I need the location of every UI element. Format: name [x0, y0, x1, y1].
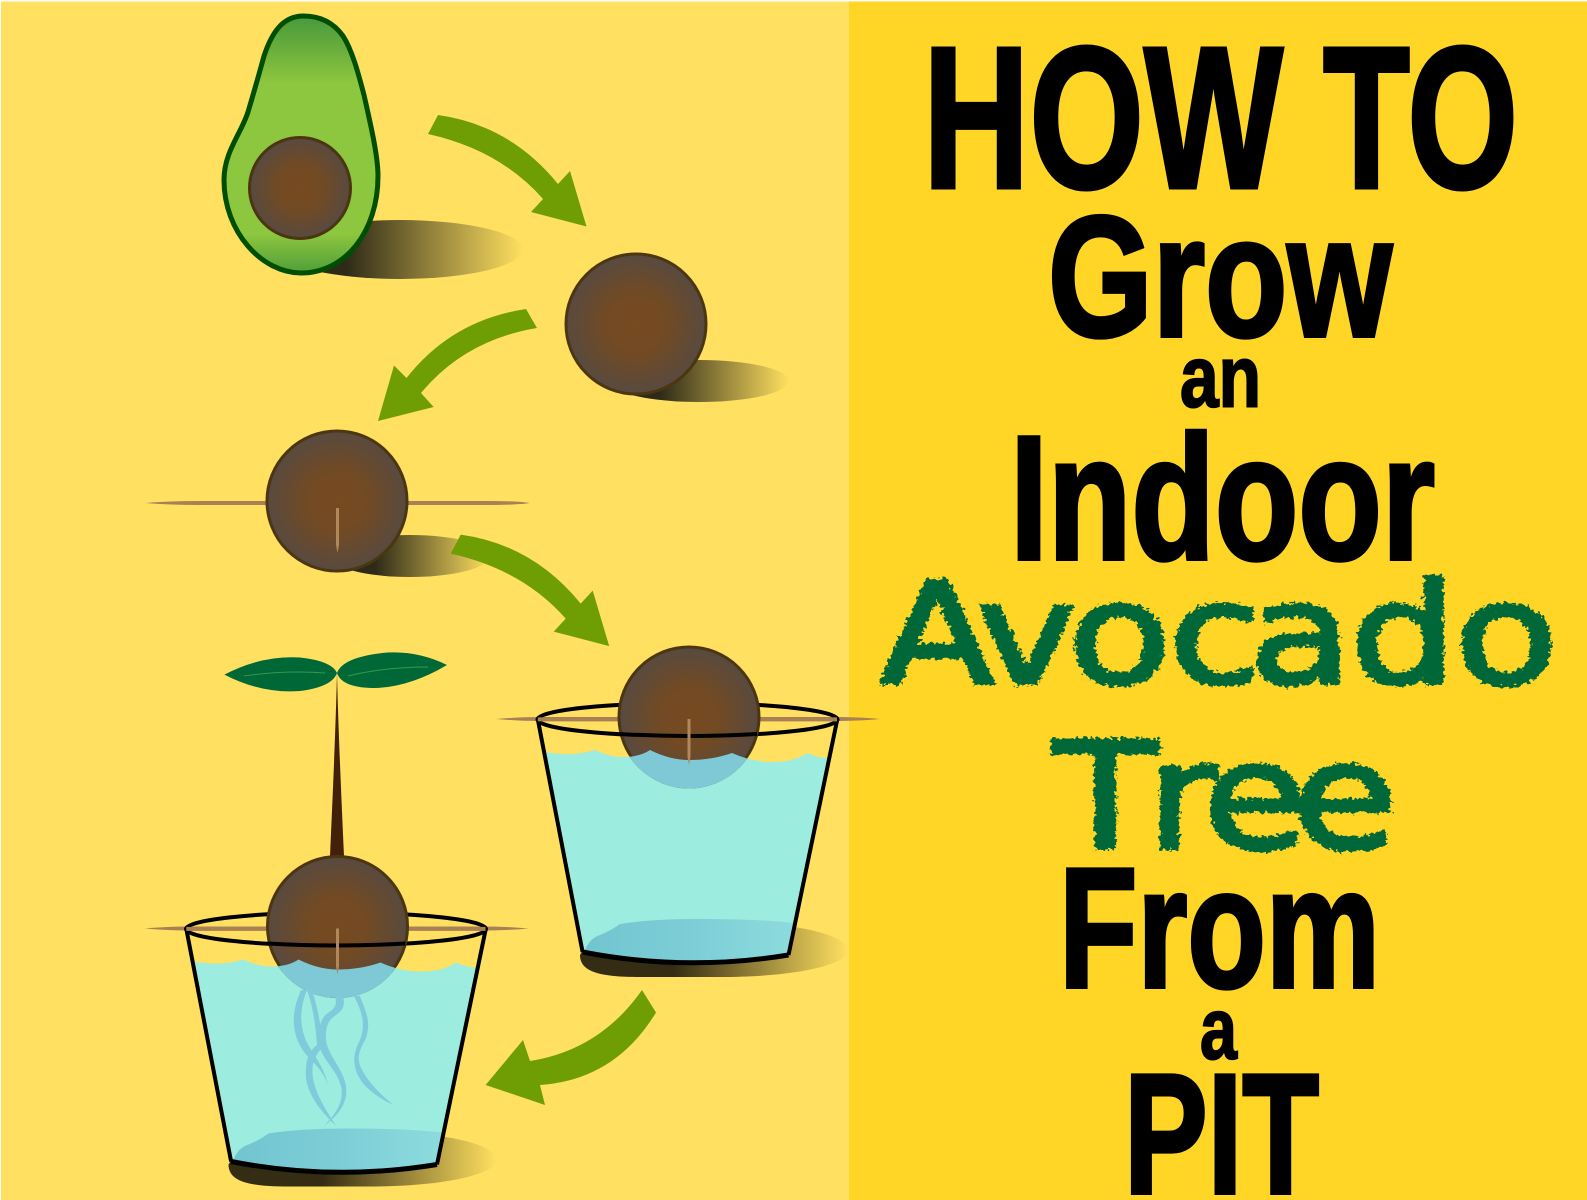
- title line: HOW TO: HOW: [923, 4, 1283, 230]
- title line: Grow: Grow: [1048, 181, 1393, 373]
- title line: Avocado: Avocado: [880, 554, 1558, 716]
- arrow: toothpicks to glass: [451, 535, 609, 646]
- panel: left illustration background: [1, 2, 849, 1200]
- icon: pit with toothpicks: [145, 431, 530, 571]
- icon: stem: [330, 672, 344, 856]
- icon: glass with pit in water: [496, 647, 880, 977]
- title line: an: an: [1180, 328, 1261, 426]
- arrow: pit to toothpicks: [378, 309, 537, 421]
- arrow: avocado to pit: [428, 115, 586, 226]
- shadow: avocado: [277, 220, 523, 279]
- title line: a: a: [1200, 980, 1237, 1078]
- title: [880, 4, 1558, 1200]
- icon: leaves: [224, 652, 447, 691]
- icon: bare pit: [566, 254, 706, 394]
- panel: right title background: [849, 2, 1587, 1200]
- icon: halved avocado: [224, 16, 378, 273]
- shadow: bare pit: [609, 360, 789, 402]
- shadow: pit with toothpicks: [330, 535, 490, 577]
- title line: Indoor: Indoor: [1010, 399, 1435, 597]
- title line: From: From: [1059, 833, 1380, 1024]
- arrow: glass to sprouted glass: [486, 990, 656, 1105]
- title line: Tree: Tree: [1052, 711, 1397, 883]
- icon: glass with sprouted pit and roots: [144, 856, 528, 1186]
- icon: roots: [294, 990, 394, 1126]
